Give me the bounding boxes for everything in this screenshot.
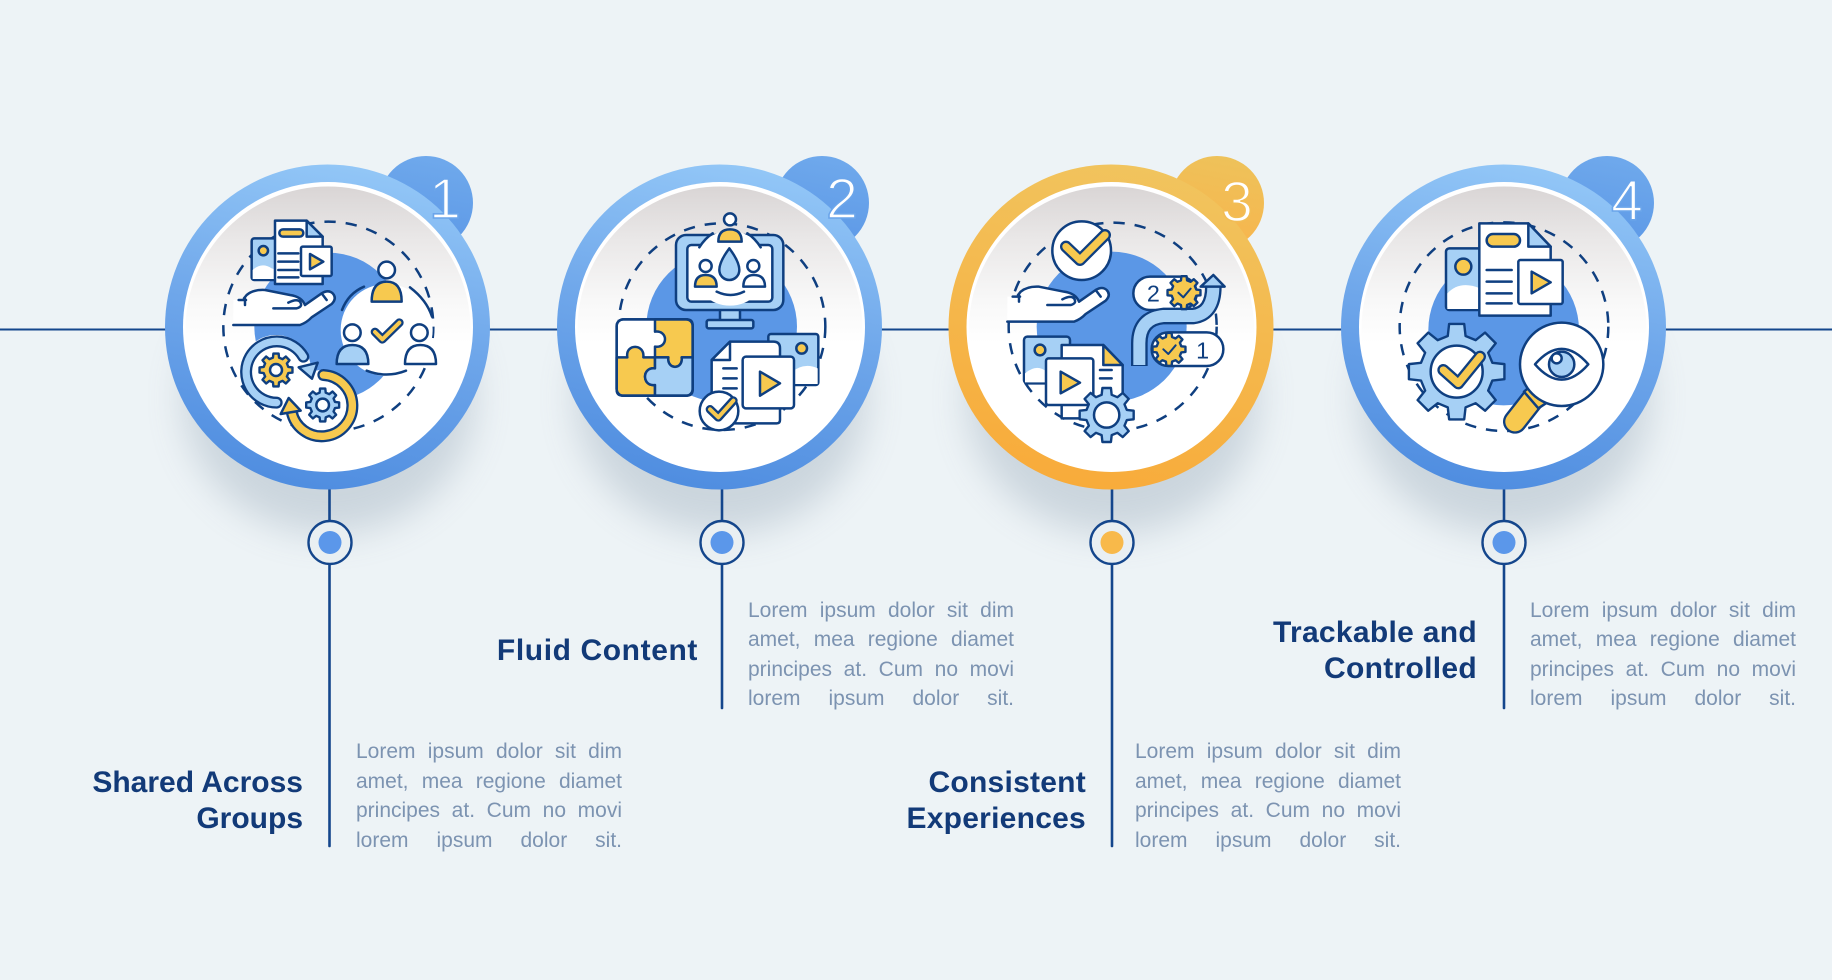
text block 4: lorem ipsum dolor sit.: [1530, 687, 1796, 710]
growth path: 1: [1196, 337, 1209, 363]
badge 1: [379, 156, 473, 250]
plate 4: [1359, 182, 1649, 472]
documents: [252, 221, 332, 284]
team circle: [337, 262, 436, 376]
panel 3: consistent experiences: [948, 156, 1274, 846]
hand: [233, 290, 335, 325]
text block 3: Lorem ipsum dolor sit dim: [1135, 740, 1401, 763]
text block 1: [356, 740, 622, 852]
text block 1: Lorem ipsum dolor sit dim: [356, 740, 622, 763]
text block 1: principes at. Cum no movi: [356, 799, 622, 822]
ring 3: [948, 164, 1274, 490]
ring 1: [165, 164, 490, 490]
check gear: [1409, 324, 1504, 419]
title: shared across groups: Groups: [196, 802, 303, 834]
text block 1: lorem ipsum dolor sit.: [356, 829, 622, 852]
ring 4: [1341, 164, 1666, 490]
text block 1: amet, mea regione diamet: [356, 770, 622, 793]
text block 2: [748, 598, 1014, 710]
text block 3: lorem ipsum dolor sit.: [1135, 829, 1401, 852]
growth path: 2: [1147, 281, 1160, 307]
title: shared across groups: [92, 766, 303, 834]
title: fluid content: Fluid Content: [497, 634, 698, 667]
text block 3: [1135, 740, 1401, 852]
plate 2: [575, 182, 865, 472]
number 2: 2: [826, 167, 858, 231]
panel 1: shared across groups: [165, 156, 490, 846]
number 3: 3: [1221, 170, 1253, 234]
monitor: [676, 213, 783, 328]
text block 3: principes at. Cum no movi: [1135, 799, 1401, 822]
title: consistent experiences: Consistent: [928, 766, 1086, 799]
connector and node 2: [700, 485, 744, 708]
text block 2: lorem ipsum dolor sit.: [748, 687, 1014, 710]
media and gear: [1024, 337, 1134, 442]
text block 2: Lorem ipsum dolor sit dim: [748, 598, 1014, 622]
icon 3: [1007, 221, 1225, 442]
hand: [1007, 287, 1109, 322]
text block 2: amet, mea regione diamet: [748, 628, 1014, 651]
number 1: 1: [429, 167, 461, 231]
ring 2: [557, 164, 882, 490]
icon 4: [1400, 222, 1608, 431]
puzzle: [617, 319, 693, 396]
text block 4: amet, mea regione diamet: [1530, 628, 1796, 651]
title: consistent experiences: Experiences: [906, 802, 1086, 834]
title: shared across groups: Shared Across: [92, 766, 303, 799]
number 4: 4: [1611, 169, 1643, 233]
badge 3: [1170, 156, 1264, 250]
badge 4: [1560, 156, 1654, 250]
badge 2: [775, 156, 869, 250]
shadows under circles: [183, 262, 1651, 534]
documents: [1446, 223, 1563, 316]
icon 2: [617, 213, 825, 430]
panel 4: trackable and controlled: [1341, 156, 1666, 708]
growth path: [1133, 275, 1225, 366]
title: trackable and controlled: Trackable and: [1273, 616, 1477, 649]
text block 4: Lorem ipsum dolor sit dim: [1530, 598, 1796, 622]
plate 3: [966, 182, 1256, 472]
horizontal timeline line: [0, 328, 1832, 330]
text block 2: principes at. Cum no movi: [748, 658, 1014, 681]
connector and node 3: [1090, 485, 1134, 846]
media documents: [700, 334, 818, 430]
magnifier with eye: [1515, 323, 1603, 422]
title: trackable and controlled: Controlled: [1324, 652, 1477, 684]
icon 1: [223, 221, 436, 440]
cycle arrows with gears: [241, 335, 358, 440]
title: trackable and controlled: [1273, 616, 1477, 684]
plate 1: [183, 182, 473, 472]
text block 3: amet, mea regione diamet: [1135, 770, 1401, 793]
text block 4: principes at. Cum no movi: [1530, 658, 1796, 681]
connector and node 1: [308, 485, 352, 846]
connector and node 4: [1482, 485, 1526, 708]
check circle: [1052, 221, 1111, 280]
text block 4: [1530, 598, 1796, 710]
panel 2: fluid content: [557, 156, 882, 708]
title: consistent experiences: [906, 766, 1086, 834]
